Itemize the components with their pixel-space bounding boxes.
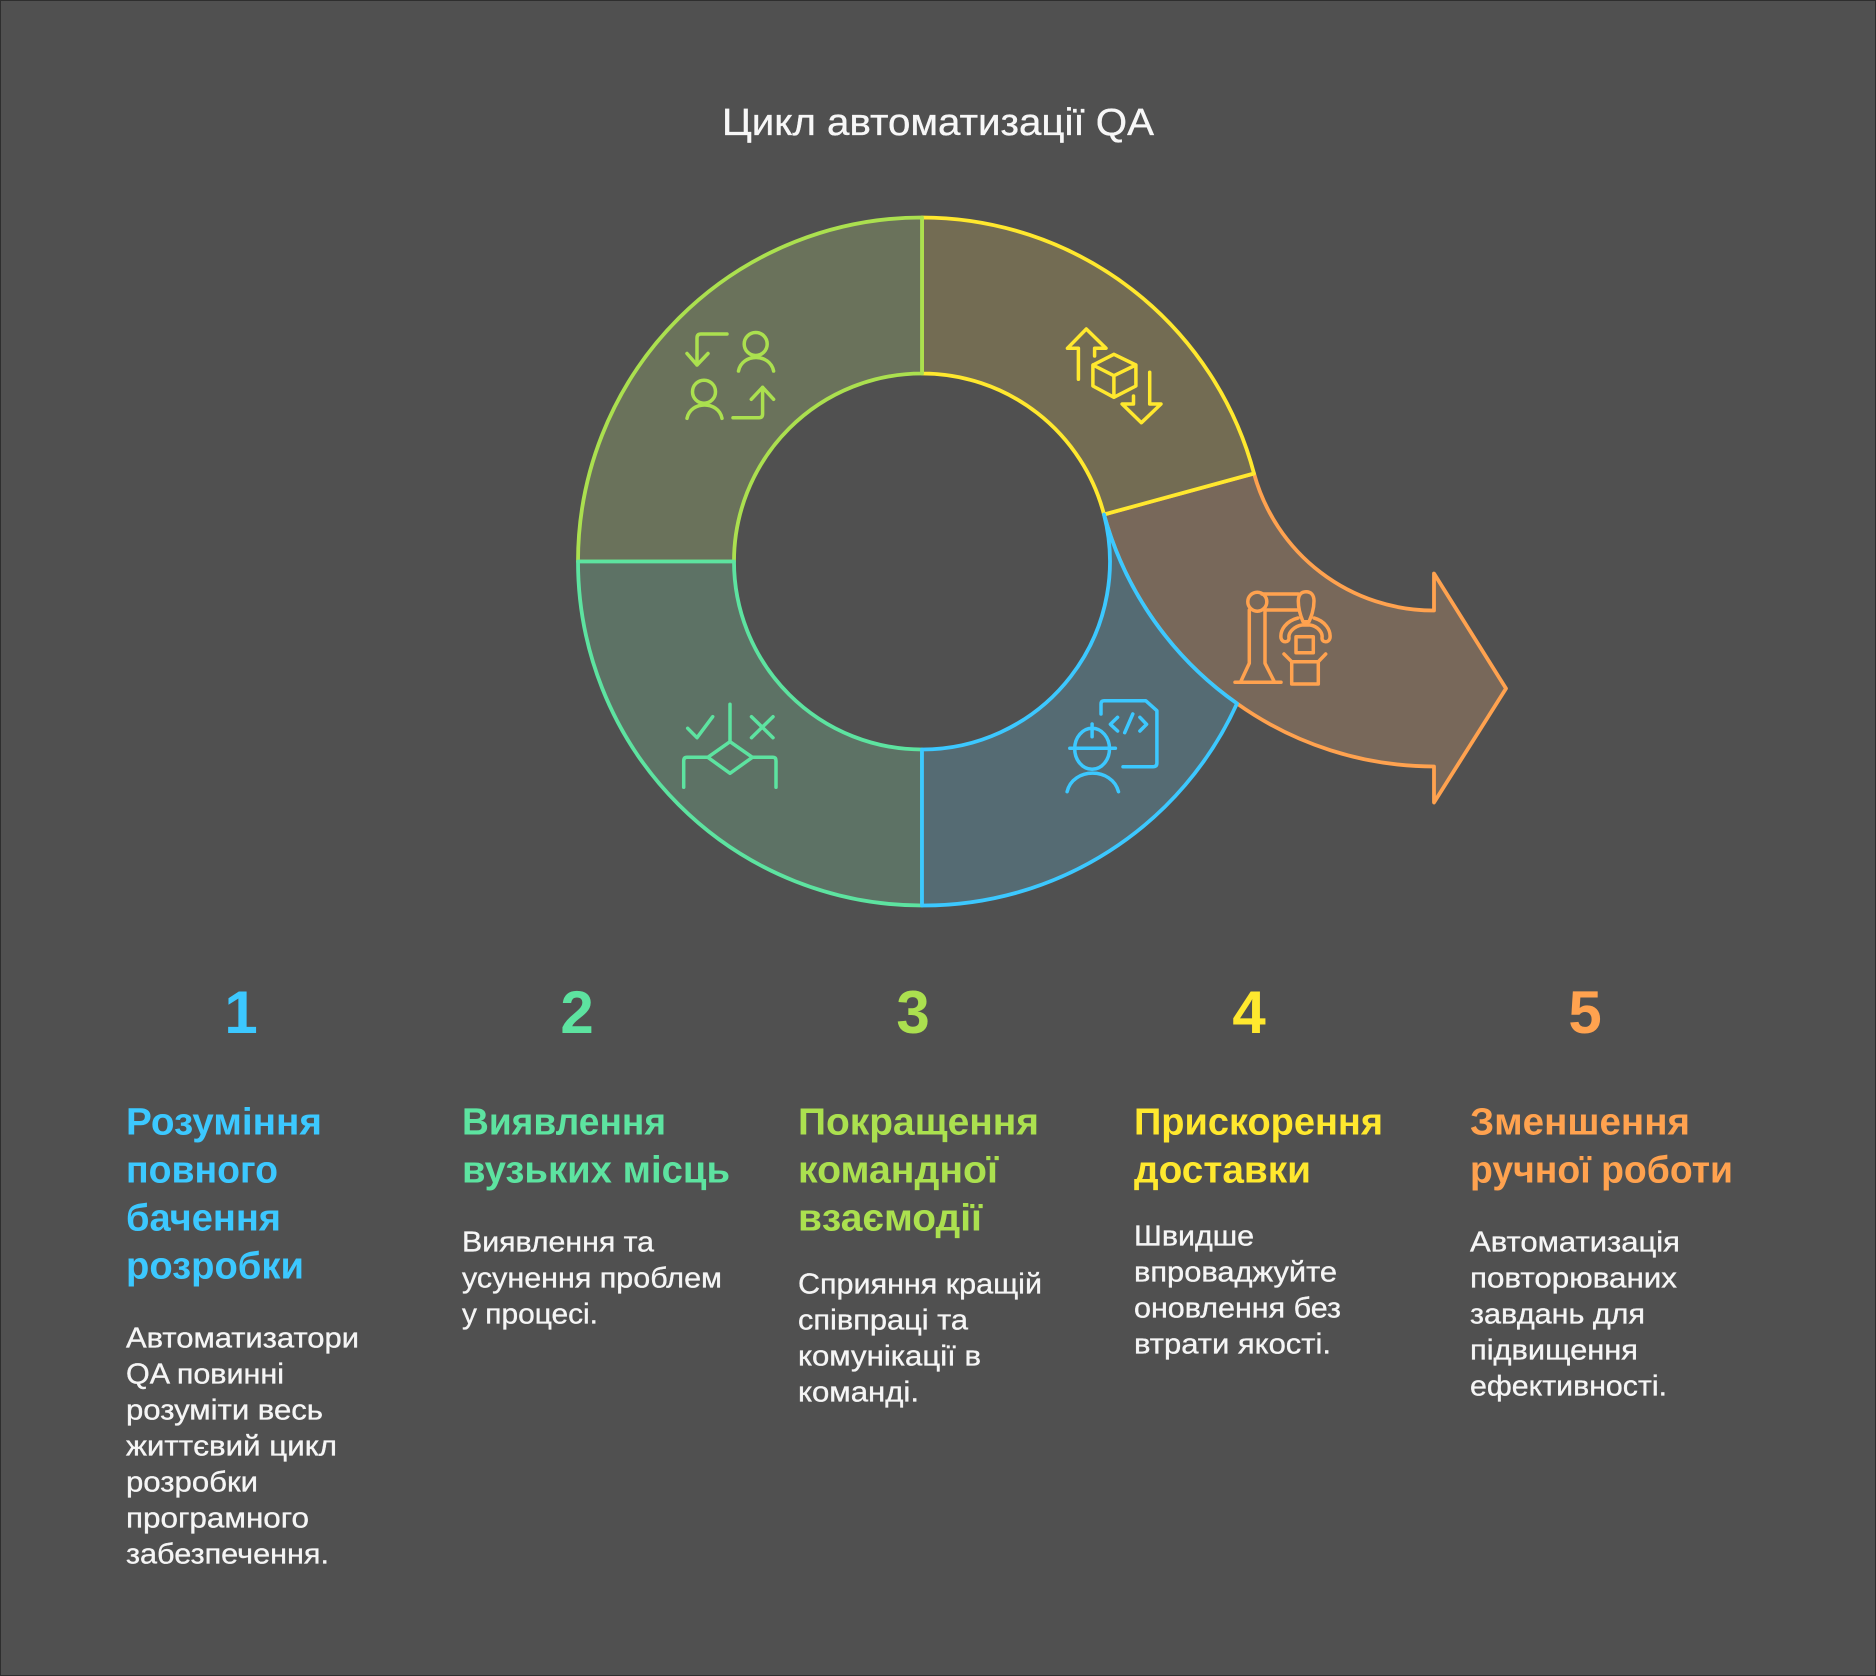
body text 3: комунікації в bbox=[798, 1341, 981, 1373]
heading 3 bbox=[798, 1100, 1039, 1239]
number 5: 5 bbox=[1568, 979, 1602, 1046]
body text 4: впроваджуйте bbox=[1134, 1257, 1337, 1289]
heading 3: командної bbox=[798, 1148, 999, 1191]
heading 3: взаємодії bbox=[798, 1196, 983, 1239]
body text 1: розробки bbox=[126, 1467, 258, 1499]
segment: green bbox=[578, 562, 922, 906]
icon: robot arm bbox=[1235, 592, 1330, 684]
body text 1: програмного bbox=[126, 1503, 309, 1535]
number 3: 3 bbox=[896, 979, 930, 1046]
segment: yellow bbox=[922, 218, 1254, 514]
icon: decision check and cross bbox=[684, 704, 776, 787]
body text 3: співпраці та bbox=[798, 1305, 968, 1337]
body text 1: Автоматизатори bbox=[126, 1323, 359, 1355]
icon: engineer with code bbox=[1067, 701, 1157, 792]
number 2: 2 bbox=[560, 979, 594, 1046]
icon: people exchange bbox=[687, 332, 774, 418]
column 3 bbox=[798, 979, 1042, 1409]
column 4 bbox=[1134, 979, 1383, 1361]
number 4: 4 bbox=[1232, 979, 1266, 1046]
heading 4 bbox=[1134, 1100, 1383, 1191]
body text 1: розуміти весь bbox=[126, 1395, 323, 1427]
cycle diagram bbox=[578, 218, 1506, 906]
title: Цикл автоматизації QA bbox=[722, 101, 1154, 144]
body text 1: забезпечення. bbox=[126, 1539, 329, 1571]
segment: lime bbox=[578, 218, 922, 562]
body text 1: QA повинні bbox=[126, 1359, 284, 1391]
heading 1: повного bbox=[126, 1148, 278, 1191]
heading 4: доставки bbox=[1134, 1148, 1311, 1191]
segment: blue bbox=[922, 514, 1237, 906]
body text 3: команді. bbox=[798, 1377, 919, 1409]
body text 2: Виявлення та bbox=[462, 1227, 654, 1259]
heading 5 bbox=[1470, 1100, 1733, 1191]
body text 4: оновлення без bbox=[1134, 1293, 1341, 1325]
body text 4: Швидше bbox=[1134, 1221, 1254, 1253]
heading 1: розробки bbox=[126, 1244, 304, 1287]
heading 1: бачення bbox=[126, 1196, 281, 1239]
body text 5: повторюваних bbox=[1470, 1263, 1678, 1295]
column 2 bbox=[462, 979, 730, 1331]
heading 2 bbox=[462, 1100, 730, 1191]
heading 1: Розуміння bbox=[126, 1100, 322, 1143]
heading 4: Прискорення bbox=[1134, 1100, 1383, 1143]
body text 1: життєвий цикл bbox=[126, 1431, 337, 1463]
body text 5: завдань для bbox=[1470, 1299, 1645, 1331]
body text 3: Сприяння кращій bbox=[798, 1269, 1042, 1301]
body text 1 bbox=[126, 1323, 359, 1571]
heading 5: ручної роботи bbox=[1470, 1148, 1733, 1191]
column 5 bbox=[1470, 979, 1733, 1403]
body text 5: підвищення bbox=[1470, 1335, 1638, 1367]
body text 4 bbox=[1134, 1221, 1341, 1361]
heading 3: Покращення bbox=[798, 1100, 1039, 1143]
body text 2 bbox=[462, 1227, 722, 1331]
body text 2: у процесі. bbox=[462, 1299, 598, 1331]
body text 5 bbox=[1470, 1227, 1680, 1403]
body text 2: усунення проблем bbox=[462, 1263, 722, 1295]
heading 2: Виявлення bbox=[462, 1100, 666, 1143]
body text 5: Автоматизація bbox=[1470, 1227, 1680, 1259]
heading 2: вузьких місць bbox=[462, 1148, 730, 1191]
icon: cube with arrows bbox=[1067, 329, 1161, 423]
segment: orange arrow bbox=[1104, 474, 1506, 802]
heading 5: Зменшення bbox=[1470, 1100, 1690, 1143]
body text 4: втрати якості. bbox=[1134, 1329, 1331, 1361]
heading 1 bbox=[126, 1100, 322, 1287]
body text 3 bbox=[798, 1269, 1042, 1409]
number 1: 1 bbox=[224, 979, 258, 1046]
column 1 bbox=[126, 979, 359, 1571]
body text 5: ефективності. bbox=[1470, 1371, 1667, 1403]
